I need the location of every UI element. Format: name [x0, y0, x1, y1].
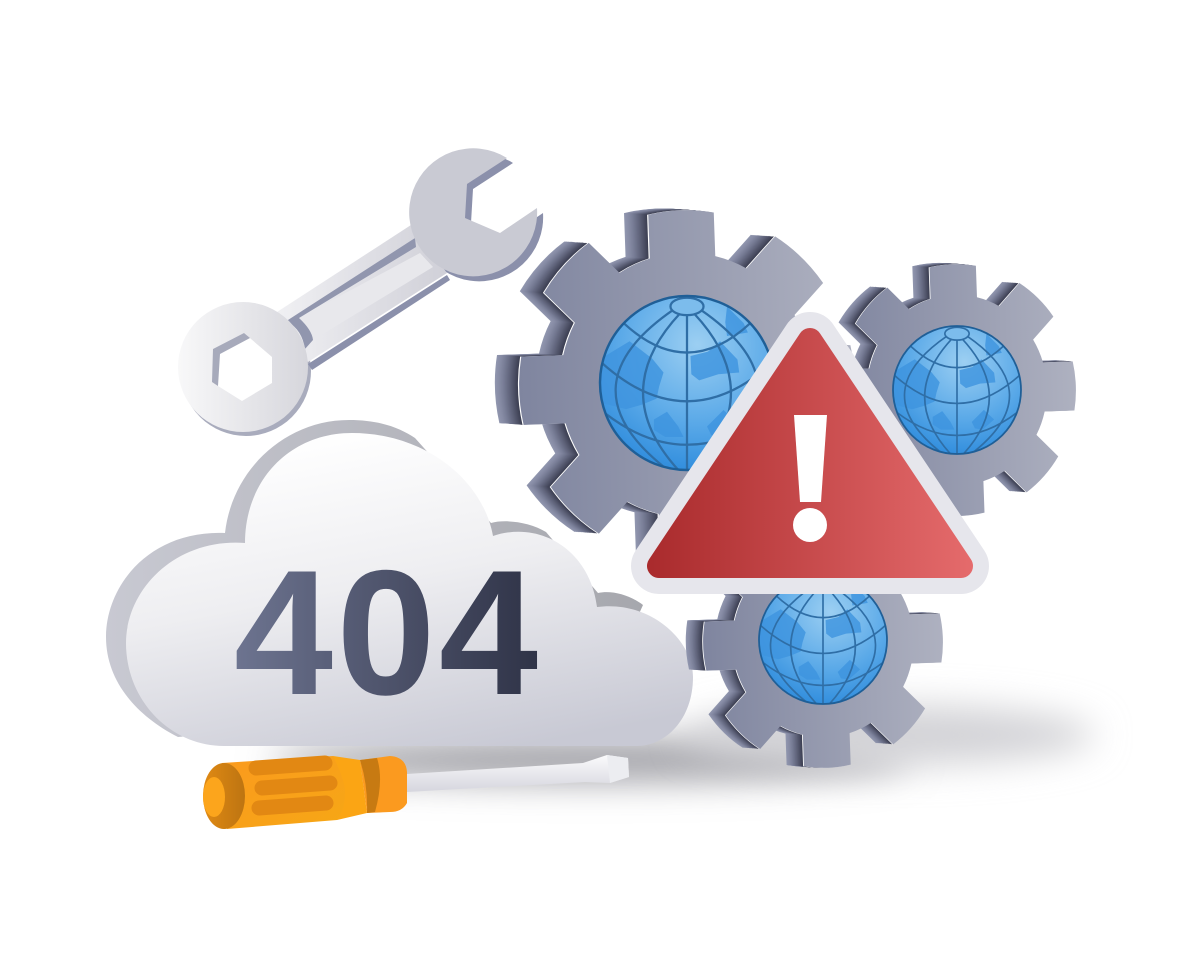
- wrench handle: [277, 225, 447, 362]
- icon: wrench: [178, 148, 543, 436]
- 404 text: 404: [234, 533, 542, 732]
- cloud front face: [126, 433, 693, 746]
- wrench back faces: [181, 153, 543, 436]
- gear: bottom with globe: [681, 510, 947, 773]
- gear: right with globe: [817, 258, 1080, 521]
- icon: screwdriver: [203, 755, 629, 829]
- gear: large with globe: [489, 202, 861, 566]
- wrench open head: [409, 148, 537, 276]
- cloud: [106, 420, 693, 746]
- wrench ring end: [178, 302, 308, 432]
- hexagon hole: [212, 333, 272, 401]
- ground shadow: [270, 705, 1095, 780]
- cloud back face: [106, 420, 643, 737]
- exclamation mark: [793, 415, 827, 542]
- warning triangle: [659, 340, 961, 566]
